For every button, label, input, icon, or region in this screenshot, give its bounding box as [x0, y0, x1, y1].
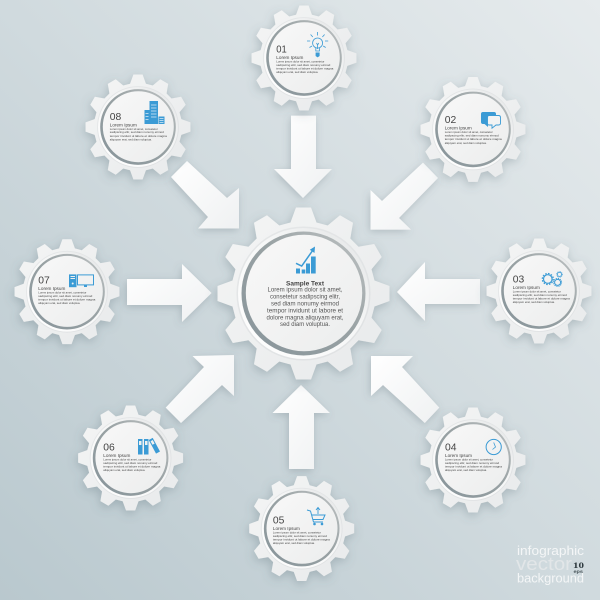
icon: cogs — [542, 272, 562, 286]
text: 05: Lorem ipsum dolor sit amet, consetetur — [273, 530, 321, 534]
text: 03: 03 — [513, 273, 524, 285]
text: 07: aliquyam erat, sed diam voluptua. — [38, 301, 80, 305]
gear 07 — [15, 239, 119, 344]
text: 08: Lorem Ipsum — [110, 122, 137, 127]
text: 05: 05 — [273, 514, 285, 526]
text block: centre body: dolore magna aliquyam erat, — [266, 314, 344, 322]
text: 02: Lorem ipsum dolor sit amet, consetetur — [445, 130, 493, 134]
icon: computer — [69, 274, 94, 287]
text: 04: aliquyam erat, sed diam voluptua. — [445, 468, 487, 472]
text: 03: Lorem ipsum dolor sit amet, consetetur — [513, 289, 561, 293]
arrow: top — [274, 116, 332, 198]
text: 08: aliquyam erat, sed diam voluptua. — [110, 137, 152, 141]
text: 07: Lorem ipsum dolor sit amet, consetetur — [38, 291, 86, 295]
text: 03: aliquyam erat, sed diam voluptua. — [513, 300, 555, 304]
gear 01 — [252, 6, 356, 110]
text: 03: Lorem Ipsum — [513, 285, 540, 290]
gear 08 — [86, 75, 190, 179]
text: 04 — [445, 441, 502, 472]
text: 06: sadipscing elitr, sed diam nonumy eirmod — [103, 461, 158, 465]
text block: centre body: Lorem ipsum dolor sit amet, — [268, 286, 343, 294]
text: 06: aliquyam erat, sed diam voluptua. — [103, 468, 145, 472]
arrow: bottom — [272, 385, 330, 469]
text: 05: tempor invidunt ut labore et dolore magna — [273, 538, 330, 542]
text: 07 — [38, 275, 96, 305]
text: 02: sadipscing elitr, sed diam nonumy eirmod — [445, 134, 499, 138]
text: 03: sadipscing elitr, sed diam nonumy eirmod — [513, 293, 567, 297]
text block: centre body: tempor invidunt ut labore et — [267, 308, 343, 314]
text: 08 — [110, 111, 167, 141]
text: 08: tempor invidunt ut labore et dolore magna — [110, 134, 167, 138]
text: 08: sadipscing elitr, sed diam nonumy eirmod — [110, 130, 164, 134]
icon: clock — [486, 439, 501, 455]
text: 01 — [276, 43, 334, 74]
text: 08: 08 — [110, 111, 121, 123]
text: 08: Lorem ipsum dolor sit amet, consetetur — [110, 127, 158, 131]
text block: centre body: sed diam nonumy eirmod — [271, 300, 339, 308]
arrow: left — [127, 264, 212, 322]
arrow: top left — [171, 161, 239, 228]
text: 05: sadipscing elitr, sed diam nonumy eirmod — [273, 534, 327, 538]
text: 01: tempor invidunt ut labore et dolore magna — [276, 66, 334, 70]
arrow: bottom right — [371, 356, 439, 423]
watermark: background — [517, 570, 584, 586]
text: 07: sadipscing elitr, sed diam nonumy eirmod — [38, 294, 93, 298]
text: 01: 01 — [276, 43, 287, 55]
text: 04: sadipscing elitr, sed diam nonumy eirmod — [445, 461, 499, 465]
text: 02: Lorem Ipsum — [445, 126, 472, 131]
text: 06 — [103, 441, 161, 472]
text: 01: aliquyam erat, sed diam voluptua. — [276, 70, 318, 74]
arrow: right — [397, 262, 480, 321]
gear 06 — [78, 406, 183, 510]
watermark: eps — [574, 569, 584, 574]
text: 06: Lorem ipsum dolor sit amet, consetetur — [103, 457, 151, 461]
text: 02 — [445, 114, 502, 145]
text: 02: aliquyam erat, sed diam voluptua. — [445, 141, 487, 145]
text: 04: 04 — [445, 441, 457, 453]
text: 01: Lorem ipsum dolor sit amet, consetetur — [276, 59, 324, 63]
text: 07: 07 — [38, 275, 50, 287]
text: 06: 06 — [103, 441, 115, 453]
heading: sample text: Sample Text — [286, 280, 325, 288]
gear 05 — [249, 476, 354, 581]
gear: centre — [218, 208, 390, 380]
gear 02 — [421, 77, 525, 182]
icon: shopping cart — [307, 508, 325, 525]
text: 01: sadipscing elitr, sed diam nonumy eirmod — [276, 63, 331, 67]
icon: buildings — [144, 101, 164, 124]
text: 04: Lorem Ipsum — [445, 453, 472, 458]
gear 04 — [421, 408, 525, 512]
icon: rising bar chart — [296, 246, 316, 274]
text: 05: aliquyam erat, sed diam voluptua. — [273, 541, 315, 545]
icon: light bulb — [307, 32, 328, 57]
text: 06: Lorem Ipsum — [103, 453, 130, 458]
watermark: infographic — [517, 543, 585, 558]
icon: binders — [138, 438, 160, 454]
text: 04: Lorem ipsum dolor sit amet, consetetur — [445, 457, 493, 461]
text: 03 — [513, 273, 570, 304]
text: 05: Lorem Ipsum — [273, 526, 300, 531]
text: 06: tempor invidunt ut labore et dolore magna — [103, 464, 161, 468]
text: 01: Lorem Ipsum — [276, 55, 303, 60]
text: 07: tempor invidunt ut labore et dolore magna — [38, 298, 96, 302]
text: 07: Lorem Ipsum — [38, 286, 65, 291]
watermark: vector — [516, 554, 572, 574]
text: 04: tempor invidunt ut labore et dolore magna — [445, 464, 502, 468]
text block: centre body: sed diam voluptua. — [280, 321, 330, 328]
text block: centre body — [266, 286, 344, 328]
text: 02: 02 — [445, 114, 456, 126]
text block: centre body: consetetur sadipscing elitr, — [270, 294, 340, 300]
watermark — [516, 543, 585, 586]
watermark: 10 — [573, 561, 584, 570]
arrow: top right — [370, 163, 438, 230]
gear 03 — [487, 239, 591, 343]
icon: speech bubbles — [481, 112, 500, 128]
text: 05 — [273, 514, 330, 545]
text: 02: tempor invidunt ut labore et dolore magna — [445, 137, 502, 141]
text: 03: tempor invidunt ut labore et dolore magna — [513, 296, 570, 300]
arrow: bottom left — [166, 355, 234, 423]
